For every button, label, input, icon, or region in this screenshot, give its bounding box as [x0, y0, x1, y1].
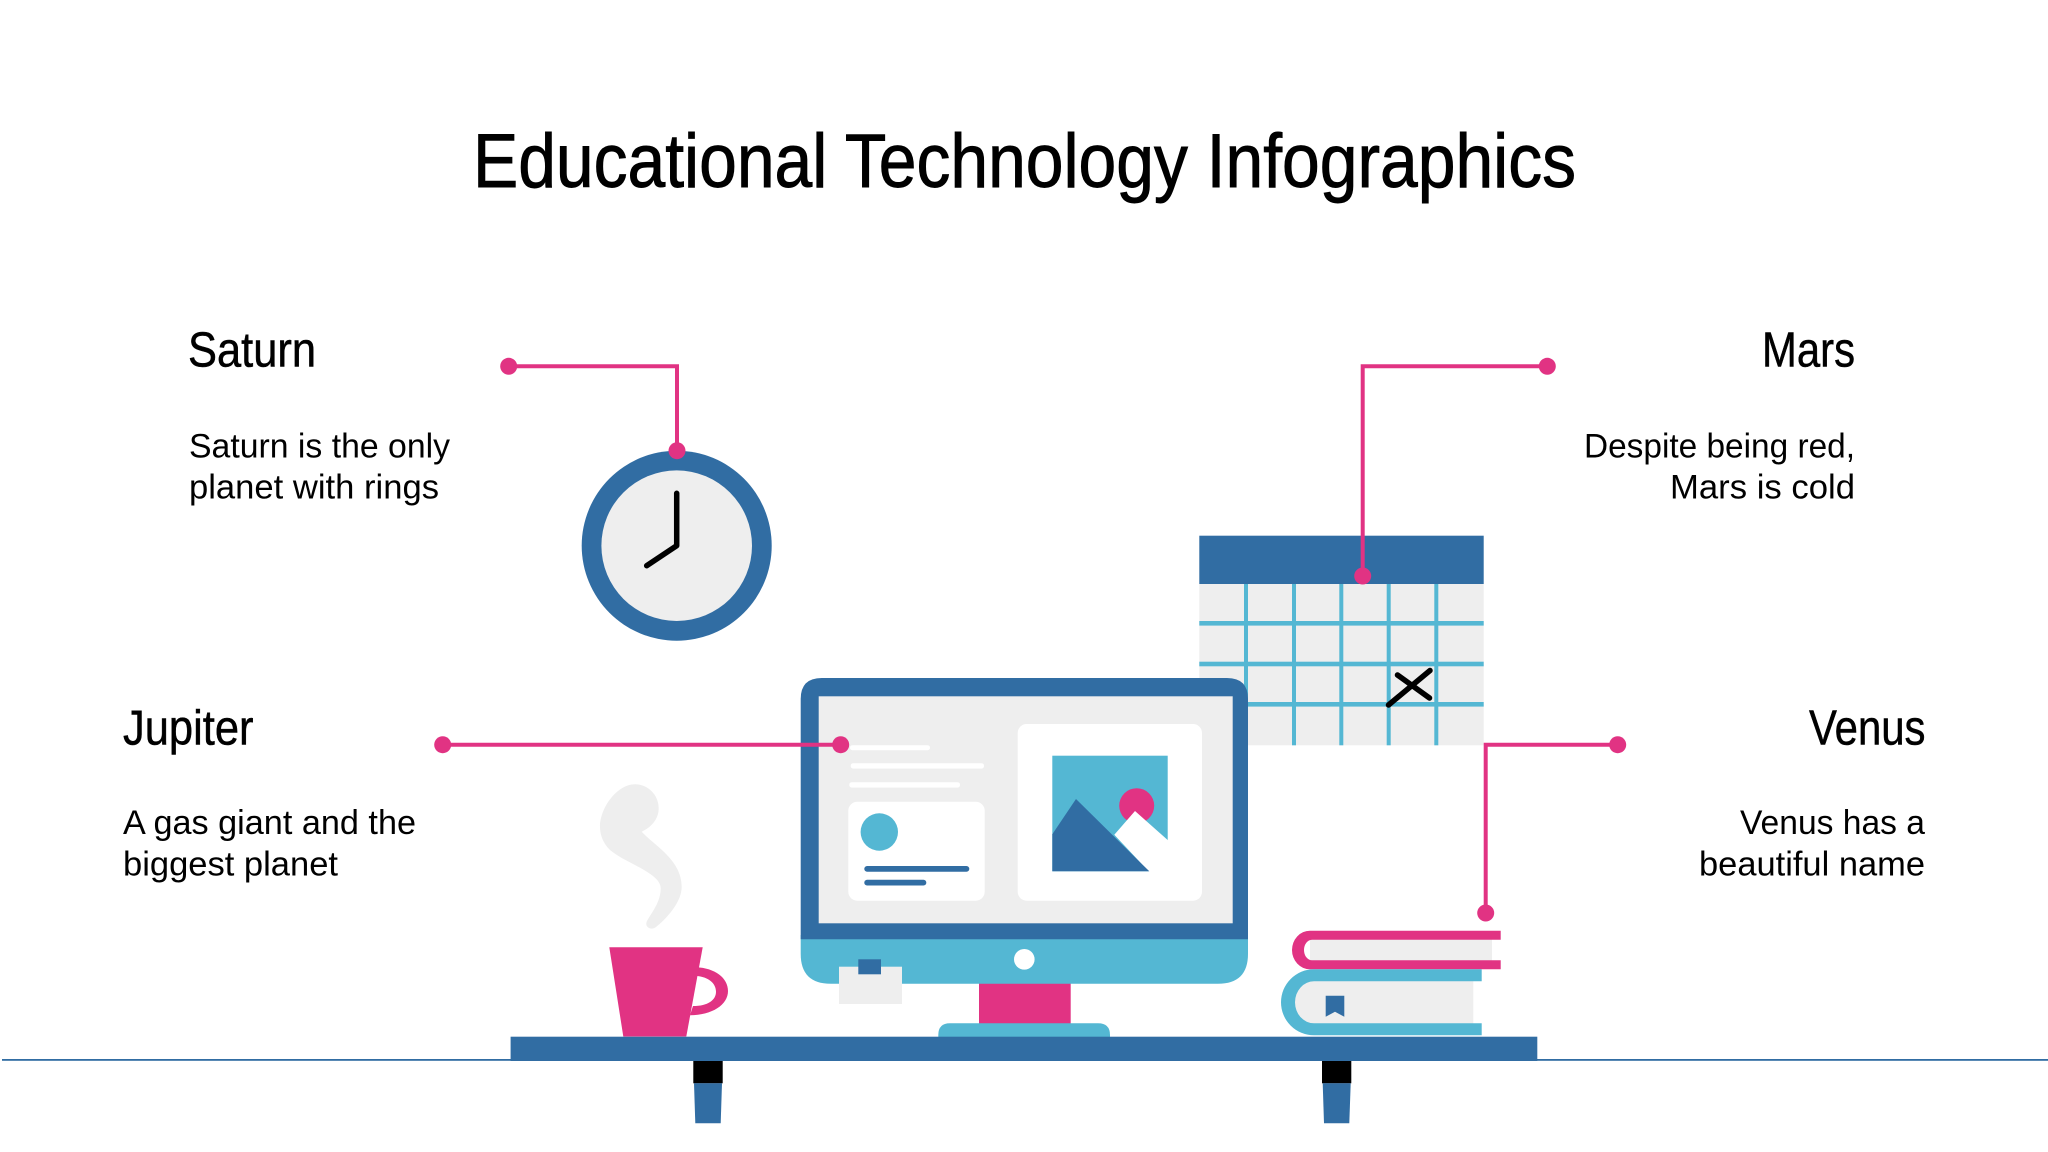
text: Jupiter description: biggest planet — [123, 845, 339, 883]
text: Saturn description — [189, 427, 450, 506]
icon: sticky note — [839, 959, 902, 1004]
right leg — [1322, 1061, 1351, 1123]
left leg — [693, 1061, 723, 1123]
profile card — [848, 802, 985, 901]
power button — [1014, 949, 1035, 970]
text: Mars description: Despite being red, — [1584, 427, 1855, 465]
baseline rule — [2, 1059, 2048, 1061]
connector: Mars to calendar — [1354, 358, 1556, 584]
picture card — [1018, 724, 1202, 901]
text: Saturn description: planet with rings — [189, 468, 439, 506]
connector: Venus to books — [1477, 736, 1626, 922]
icon: books — [1281, 931, 1501, 1035]
text lines — [849, 745, 984, 788]
desk — [511, 1037, 1537, 1123]
text: Jupiter description: A gas giant and the — [123, 804, 416, 842]
bottom book — [1281, 969, 1482, 1035]
connector: Saturn to clock — [500, 358, 686, 459]
heading: Saturn: Saturn — [188, 323, 316, 377]
text: Venus description — [1699, 804, 1925, 883]
panel: Venus — [1699, 702, 1926, 883]
panel: Mars — [1584, 323, 1855, 506]
icon: coffee cup — [609, 947, 728, 1036]
panel: Jupiter — [123, 702, 416, 883]
icon: clock — [582, 451, 772, 641]
text: Mars description: Mars is cold — [1670, 468, 1855, 506]
panel: Saturn — [188, 323, 450, 506]
text: Venus description: Venus has a — [1740, 804, 1925, 842]
text: Saturn description: Saturn is the only — [189, 427, 450, 465]
text: Venus description: beautiful name — [1699, 845, 1925, 883]
monitor frame — [801, 678, 1248, 939]
icon: calendar — [1199, 536, 1484, 745]
heading: Venus: Venus — [1809, 702, 1926, 756]
title: Educational Technology Infographics — [473, 119, 1576, 204]
connector: Jupiter to monitor — [434, 736, 849, 753]
icon: steam — [600, 784, 682, 929]
monitor screen — [819, 696, 1233, 923]
monitor stand — [979, 983, 1071, 1024]
top book — [1292, 931, 1501, 969]
heading: Mars: Mars — [1762, 323, 1855, 377]
heading: Jupiter: Jupiter — [123, 702, 254, 756]
monitor chin — [801, 935, 1248, 984]
icon: monitor — [801, 678, 1248, 1037]
text: Jupiter description — [123, 804, 416, 883]
text: Mars description — [1584, 427, 1855, 506]
monitor base — [938, 1023, 1110, 1037]
